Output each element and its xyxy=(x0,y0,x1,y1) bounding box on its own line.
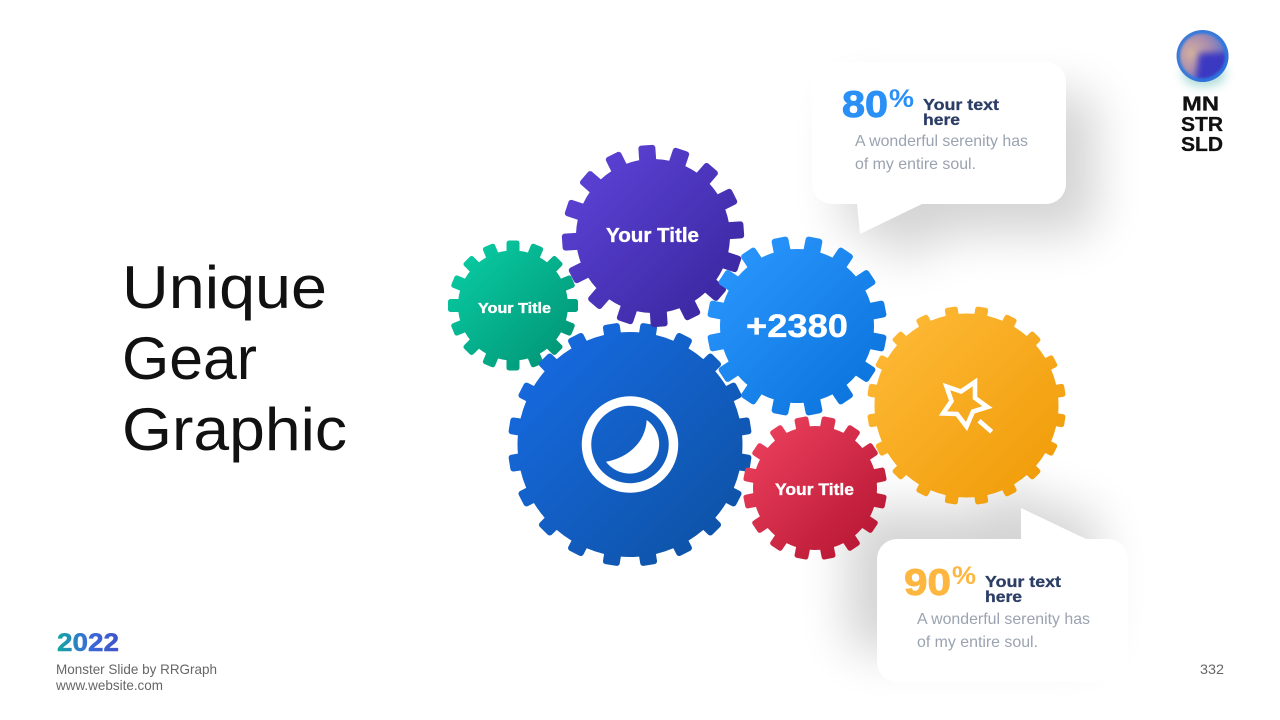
title: Graphic xyxy=(122,396,347,463)
logo wordmark: MN xyxy=(1182,94,1219,116)
logo wordmark: STR xyxy=(1181,114,1224,136)
callout: 90%: of my entire soul. xyxy=(917,634,1038,651)
callout: 90%: % xyxy=(952,562,976,590)
footer: credits: www.website.com xyxy=(55,677,163,693)
callout: 90%: here xyxy=(985,589,1022,606)
gear: light blue xyxy=(703,232,891,420)
gear: green: Your Title xyxy=(478,300,551,317)
footer: credits xyxy=(55,661,217,693)
title: Unique xyxy=(122,254,327,321)
title: Gear xyxy=(122,325,257,392)
callout: 90%: 90 xyxy=(904,562,951,603)
gear: purple: Your Title xyxy=(606,225,699,247)
gear: green xyxy=(445,238,581,374)
logo xyxy=(1176,30,1232,156)
gear: light blue: +2380 xyxy=(746,308,848,344)
callout: 90% xyxy=(877,508,1128,682)
gear: large blue xyxy=(505,320,755,570)
gear: red xyxy=(743,416,887,560)
icon: magic wand star xyxy=(943,382,992,432)
logo glow xyxy=(1182,61,1226,87)
callout: 90%: Your text xyxy=(985,574,1062,591)
gear: red: Your Title xyxy=(775,480,854,499)
callout: 80% xyxy=(812,62,1066,234)
callout: 80%: % xyxy=(889,85,914,113)
page number: 332 xyxy=(1200,661,1224,677)
callout: 80%: 80 xyxy=(842,84,888,125)
callout: 80%: here xyxy=(923,112,960,129)
logo wordmark xyxy=(1181,94,1224,156)
footer: year: 2022 xyxy=(57,629,119,657)
callout shadow: top xyxy=(842,92,1096,264)
logo wordmark: SLD xyxy=(1181,134,1223,156)
footer: credits: Monster Slide by RRGraph xyxy=(56,661,217,677)
callout: 80%: of my entire soul. xyxy=(855,156,976,173)
callout: 90%: A wonderful serenity has xyxy=(917,611,1090,628)
callout: 80%: A wonderful serenity has xyxy=(855,133,1028,150)
gear: purple xyxy=(558,141,748,331)
logo orb xyxy=(1176,30,1232,84)
callout: 80%: Your text xyxy=(923,97,1000,114)
title xyxy=(122,254,347,463)
callout shadow: bottom xyxy=(847,478,1098,652)
icon: moon in ring xyxy=(586,401,674,488)
gear: yellow xyxy=(863,302,1070,509)
